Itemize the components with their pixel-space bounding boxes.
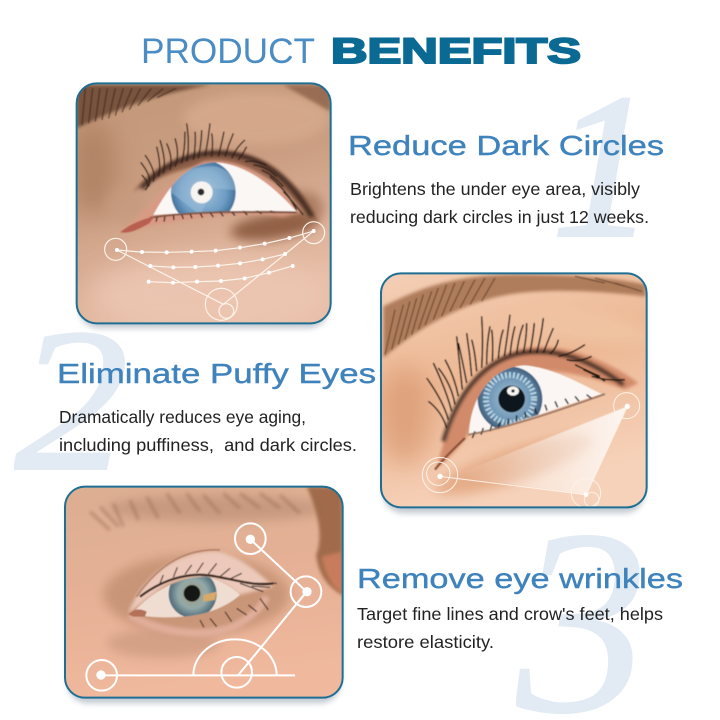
panel: eliminate puffy eyes photo xyxy=(378,273,653,513)
text: reduce dark circles description: reducing dark circles in just 12 weeks. xyxy=(350,207,649,227)
text: wrinkles description: restore elasticity. xyxy=(357,632,494,652)
overlay lines: triangle guide xyxy=(422,393,640,508)
overlay lines: under-eye guide xyxy=(105,222,325,320)
iris xyxy=(478,367,542,431)
lashes xyxy=(427,315,625,438)
lashes xyxy=(141,123,303,223)
heading: remove eye wrinkles: Remove eye wrinkles xyxy=(357,563,683,594)
panel: remove eye wrinkles photo xyxy=(65,487,343,703)
title xyxy=(141,32,581,71)
panel: reduce dark circles photo xyxy=(70,83,331,335)
iris xyxy=(170,162,236,214)
lashes xyxy=(140,575,273,597)
eye white xyxy=(469,365,602,435)
heading: reduce dark circles: Reduce Dark Circles xyxy=(348,130,664,161)
text: wrinkles description xyxy=(357,604,663,652)
text: puffy eyes description: including puffiness, and dark circles. xyxy=(59,435,357,455)
text: puffy eyes description: Dramatically reduces eye aging, xyxy=(59,407,306,427)
text: wrinkles description: Target fine lines and crow's feet, helps xyxy=(357,604,663,624)
title: PRODUCT xyxy=(141,32,315,71)
highlighted triangle xyxy=(474,407,627,494)
text: reduce dark circles description xyxy=(350,179,649,227)
eye white xyxy=(132,577,240,617)
text: puffy eyes description xyxy=(59,407,357,455)
eyelid xyxy=(128,552,273,613)
heading: eliminate puffy eyes: Eliminate Puffy Eyes xyxy=(57,358,376,389)
iris xyxy=(169,570,217,618)
eye white xyxy=(153,162,297,215)
overlay lines: wrinkle guide xyxy=(86,523,321,691)
text: reduce dark circles description: Brightens the under eye area, visibly xyxy=(350,179,640,199)
title: BENEFITS xyxy=(331,32,581,71)
